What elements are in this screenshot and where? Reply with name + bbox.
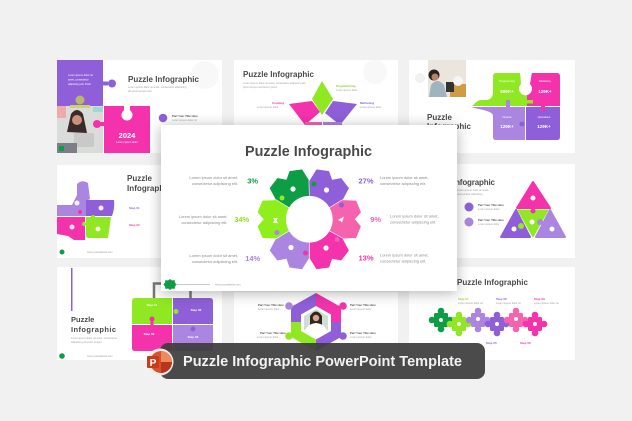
step labels bbox=[458, 297, 559, 345]
pink 2024 puzzle piece: Lorem ipsum dolor bbox=[116, 140, 138, 144]
percentage values: 9% bbox=[370, 215, 381, 224]
slide: top left cover: Lorem ipsum dolor sit amet, consectetur adipiscing bbox=[128, 85, 187, 89]
triangle chart bbox=[501, 182, 565, 237]
four-piece puzzle chart: Finance bbox=[502, 115, 512, 119]
gear connector knobs bbox=[274, 182, 344, 256]
slide: bottom right puzzle row bbox=[409, 267, 575, 360]
right text blocks: consectetur adipiscing elit. bbox=[390, 220, 436, 224]
gear icons bbox=[273, 186, 344, 251]
right text blocks: Lorem ipsum dolor sit amet, bbox=[380, 252, 429, 258]
icon: PowerPoint logo bbox=[146, 348, 174, 376]
four-piece puzzle chart bbox=[471, 72, 560, 140]
left text blocks: Lorem ipsum dolor sit amet, bbox=[179, 214, 228, 219]
slide: bottom left step puzzle: adipiscing elit proin tempor bbox=[71, 340, 102, 344]
percentage values: 14% bbox=[245, 254, 261, 263]
puzzle row chart bbox=[429, 308, 547, 336]
list items: Part Your Title Here bbox=[478, 218, 504, 222]
slide: top left cover bbox=[57, 60, 222, 153]
star labels: Marketing bbox=[360, 101, 374, 105]
slide: bottom left step puzzle bbox=[57, 267, 222, 360]
hexagon labels: Part Your Title Here bbox=[350, 303, 376, 307]
slide: middle right triangle puzzle: Lorem ipsum dolor sit amet, bbox=[457, 188, 489, 192]
photo: woman bbox=[415, 60, 466, 97]
star labels: Lorem ipsum dolor bbox=[257, 105, 279, 109]
icon item bbox=[159, 114, 198, 122]
hexagon labels: Lorem ipsum dolor bbox=[257, 335, 279, 339]
step labels: Step 06 bbox=[520, 341, 531, 345]
slide: top centre star puzzle: proin tempor sed lorem ipsum bbox=[243, 85, 277, 89]
title banner bbox=[160, 343, 485, 379]
footer logo and website bbox=[164, 279, 241, 290]
main slide: gear puzzle bbox=[161, 125, 457, 291]
slide: bottom centre hexagon bbox=[234, 292, 398, 360]
step labels: Lorem ipsum dolor sit bbox=[534, 301, 559, 305]
slide: middle left thumbs-up puzzle: Step 02 bbox=[129, 223, 140, 227]
slide: middle left thumbs-up puzzle bbox=[57, 165, 222, 258]
slide: middle left thumbs-up puzzle: Step 01 bbox=[129, 206, 140, 210]
star labels bbox=[257, 84, 382, 109]
star labels: Programming bbox=[336, 84, 356, 88]
four-piece puzzle chart: 129K+ bbox=[538, 89, 552, 94]
right text blocks: consectetur adipiscing elit. bbox=[380, 181, 426, 186]
thumbs-up chart bbox=[57, 181, 114, 240]
left text blocks: consectetur adipiscing elit. bbox=[181, 220, 228, 225]
gear chart bbox=[257, 165, 361, 274]
footer logo: www.yourwebsite.com bbox=[87, 354, 113, 358]
star labels: Creating bbox=[272, 101, 284, 105]
four-piece puzzle chart: 129K+ bbox=[537, 124, 551, 129]
slide: middle right triangle puzzle: consectetur adipiscing bbox=[457, 192, 483, 196]
star labels: Lorem ipsum dolor bbox=[336, 88, 358, 92]
slide: bottom left step puzzle: Infographic bbox=[71, 325, 116, 334]
photo: woman in hexagon bbox=[301, 306, 331, 340]
main title: Puzzle Infographic bbox=[245, 144, 372, 160]
right text blocks bbox=[380, 175, 439, 264]
list items bbox=[464, 202, 504, 226]
slide: middle right triangle puzzle: Puzzle Infographic bbox=[427, 178, 496, 187]
slide: bottom left step puzzle: Lorem ipsum dolor sit amet, consectetur bbox=[71, 336, 117, 340]
star puzzle chart bbox=[289, 81, 357, 130]
left text blocks: consectetur adipiscing elit. bbox=[192, 259, 238, 264]
star labels: Lorem ipsum dolor bbox=[360, 105, 382, 109]
footer logo bbox=[60, 250, 113, 254]
percentage values bbox=[234, 176, 381, 263]
four-piece puzzle chart: 589K+ bbox=[500, 89, 514, 94]
percentage values: 3% bbox=[247, 176, 258, 186]
right text blocks: Lorem ipsum dolor sit amet, bbox=[390, 214, 439, 218]
slide: top left cover: elit proin tempor sed bbox=[128, 89, 152, 93]
four-piece puzzle chart: Operations bbox=[538, 115, 551, 119]
list items: Part Your Title Here bbox=[478, 203, 504, 207]
percentage values: 34% bbox=[234, 215, 250, 224]
slide: bottom right puzzle row: Puzzle Infographic bbox=[457, 278, 529, 287]
four-piece puzzle chart: Programming bbox=[499, 79, 515, 83]
slide: top centre star puzzle: Lorem ipsum dolor sit amet, consectetur adipiscing elit bbox=[243, 81, 306, 85]
four step puzzle: Step 02 bbox=[191, 308, 202, 312]
right text blocks: consectetur adipiscing elit. bbox=[380, 258, 426, 264]
pink 2024 puzzle piece: 2024 bbox=[119, 131, 136, 140]
slide: top centre star puzzle bbox=[234, 60, 398, 130]
list items: Lorem ipsum dolor bbox=[478, 222, 500, 226]
left text blocks bbox=[179, 175, 238, 264]
four step puzzle bbox=[132, 298, 213, 351]
purple puzzle panel bbox=[57, 60, 116, 107]
percentage values: 27% bbox=[358, 176, 374, 186]
left text blocks: consectetur adipiscing elit. bbox=[192, 181, 238, 186]
hexagon puzzle bbox=[285, 293, 347, 351]
slide: top right four-piece puzzle: Infographic bbox=[427, 122, 472, 131]
left text blocks: Lorem ipsum dolor sit amet, bbox=[189, 175, 238, 180]
footer logo and website: www.yourwebsite.com bbox=[215, 282, 241, 286]
step labels: Step 01 bbox=[458, 297, 469, 301]
four step puzzle: Step 03 bbox=[144, 332, 155, 336]
hexagon labels: Part Your Title Here bbox=[350, 331, 376, 335]
slide: middle right triangle puzzle bbox=[409, 164, 575, 258]
icon item: Lorem ipsum dolor sit bbox=[172, 118, 197, 122]
hexagon labels: Part Your Title Here bbox=[260, 331, 286, 335]
slide: middle left thumbs-up puzzle: Puzzle bbox=[127, 174, 152, 183]
slide: bottom left step puzzle: Puzzle bbox=[71, 315, 94, 324]
purple puzzle panel: amet, consectetur bbox=[68, 78, 89, 82]
hexagon labels: Lorem ipsum dolor bbox=[350, 307, 372, 311]
title banner: Puzzle Infographic PowerPoint Template bbox=[183, 354, 462, 370]
purple puzzle panel: Lorem ipsum dolor sit bbox=[68, 73, 93, 77]
step labels: Lorem ipsum dolor sit bbox=[458, 301, 483, 305]
hexagon labels: Lorem ipsum dolor bbox=[258, 307, 280, 311]
slide: middle left thumbs-up puzzle: Infographic bbox=[127, 184, 172, 193]
pink 2024 puzzle piece bbox=[93, 105, 150, 153]
four-piece puzzle chart: Marketing bbox=[539, 79, 551, 83]
icon item: Part Your Title Here bbox=[172, 114, 198, 118]
percentage values: 13% bbox=[358, 254, 374, 262]
four step puzzle: Step 01 bbox=[147, 303, 158, 307]
slide heading: Puzzle Infographic bbox=[128, 75, 200, 84]
list items: Lorem ipsum dolor bbox=[478, 207, 500, 211]
hexagon labels bbox=[257, 303, 376, 339]
slide: top right four-piece puzzle: Puzzle bbox=[427, 113, 452, 122]
photo: woman at laptop bbox=[57, 96, 103, 153]
right text blocks: Lorem ipsum dolor sit amet, bbox=[380, 175, 429, 180]
hexagon labels: Lorem ipsum dolor bbox=[350, 335, 372, 339]
hexagon labels: Part Your Title Here bbox=[258, 303, 284, 307]
footer logo bbox=[59, 353, 113, 359]
step labels: Step 02 bbox=[496, 297, 507, 301]
slide: top right four-piece puzzle bbox=[409, 60, 575, 153]
connector lines bbox=[154, 284, 190, 298]
step labels: Lorem ipsum dolor sit bbox=[496, 301, 521, 305]
footer logo: www.yourwebsite.com bbox=[87, 250, 113, 254]
left text blocks: Lorem ipsum dolor sit amet, bbox=[189, 253, 238, 258]
icon: PowerPoint logo: P bbox=[150, 358, 157, 369]
four step puzzle: Step 04 bbox=[188, 335, 199, 339]
step labels: Step 03 bbox=[534, 297, 545, 301]
slide: top centre star puzzle: Puzzle Infographic bbox=[243, 70, 315, 79]
purple puzzle panel: adipiscing elit. Proin bbox=[68, 82, 92, 86]
four-piece puzzle chart: 129K+ bbox=[500, 124, 514, 129]
step labels: Step 05 bbox=[486, 341, 497, 345]
